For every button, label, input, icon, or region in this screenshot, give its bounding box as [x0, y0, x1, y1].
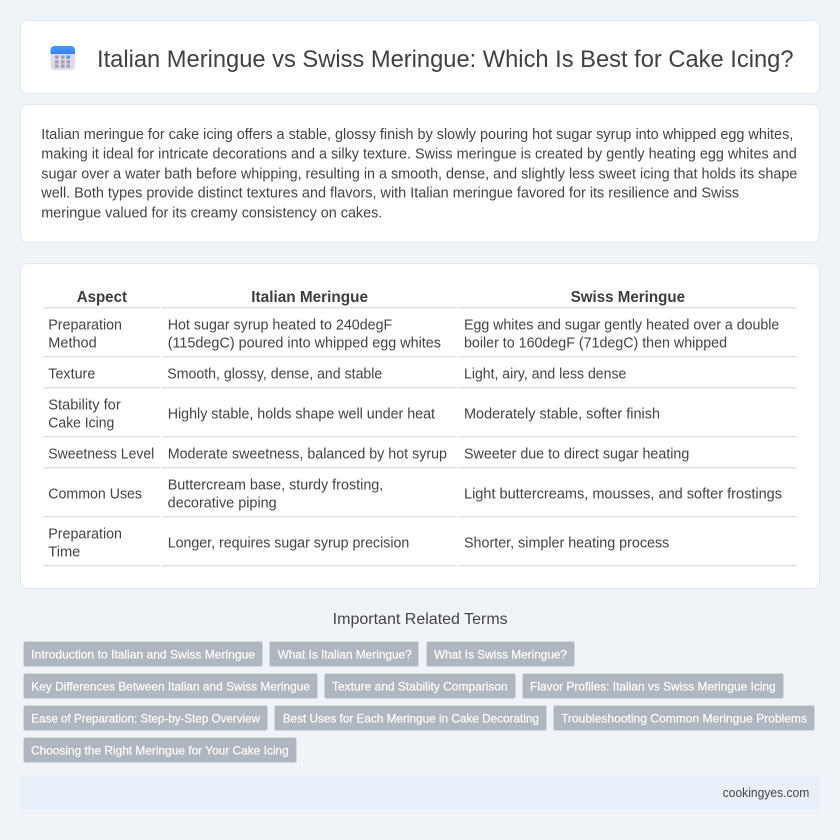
tag: Flavor Profiles: Italian vs Swiss Meringue Icing — [530, 679, 776, 693]
tag — [270, 642, 418, 666]
panel: header — [20, 20, 820, 94]
row: preparation method: Preparation — [48, 317, 122, 333]
row: preparation method: (115degC) poured into whipped egg whites — [168, 335, 441, 351]
tag: Best Uses for Each Meringue in Cake Decorating — [283, 711, 539, 725]
tag: Key Differences Between Italian and Swiss Meringue — [31, 679, 310, 693]
row: preparation method: boiler to 160degF (71degC) then whipped — [464, 335, 727, 351]
table header: Aspect — [77, 289, 128, 306]
table header: Italian Meringue — [251, 289, 368, 306]
tag — [554, 706, 814, 730]
row: stability — [43, 397, 797, 437]
tag — [274, 706, 546, 730]
row: common uses — [43, 477, 797, 517]
row: preparation time: Time — [48, 544, 80, 560]
table header — [43, 289, 797, 308]
row: texture: Smooth, glossy, dense, and stable — [167, 366, 382, 382]
row: texture: Light, airy, and less dense — [464, 366, 626, 382]
tag: What Is Italian Meringue? — [278, 647, 412, 661]
row: preparation method: Hot sugar syrup heated to 240degF — [168, 317, 393, 333]
row: stability: Moderately stable, softer finish — [464, 406, 660, 422]
row: sweetness — [43, 446, 797, 468]
row: preparation time: Preparation — [48, 526, 122, 542]
panel: comparison table — [20, 264, 820, 588]
tag: Introduction to Italian and Swiss Meringue — [31, 647, 255, 661]
tag — [24, 674, 318, 698]
row: texture: Texture — [48, 366, 95, 382]
tag — [522, 674, 784, 698]
row: preparation method: Egg whites and sugar gently heated over a double — [464, 317, 779, 333]
row: texture — [43, 366, 797, 388]
row: sweetness: Sweeter due to direct sugar heating — [464, 446, 689, 462]
row: stability: Stability for — [48, 397, 121, 413]
tag: Choosing the Right Meringue for Your Cake Icing — [31, 743, 289, 757]
tag — [324, 674, 516, 698]
row: common uses: Common Uses — [48, 486, 142, 502]
row: sweetness: Sweetness Level — [48, 446, 154, 462]
tag — [24, 738, 296, 762]
row: common uses: Buttercream base, sturdy frosting, — [168, 477, 383, 493]
table header: Swiss Meringue — [571, 289, 685, 306]
row: stability: Highly stable, holds shape well under heat — [168, 406, 435, 422]
tag — [24, 642, 262, 666]
row: preparation time: Shorter, simpler heating process — [464, 535, 669, 551]
tag: Texture and Stability Comparison — [332, 679, 508, 693]
intro text: Italian meringue for cake icing offers a stable, glossy finish by slowly pouring hot sugar syrup into whipped egg whites, — [41, 127, 793, 143]
source text: cookingyes.com — [723, 786, 809, 800]
related term tags — [24, 642, 814, 762]
intro text: sugar over a water bath before whipping, resulting in a smooth, dense, and slightly less sweet icing that holds its shape — [41, 166, 797, 182]
heading: related terms: Important Related Terms — [333, 611, 508, 628]
row: preparation time — [43, 526, 797, 566]
row: preparation method — [43, 317, 797, 357]
tag — [426, 642, 574, 666]
title: Italian Meringue vs Swiss Meringue: Which Is Best for Cake Icing? — [97, 46, 794, 73]
footer — [20, 776, 820, 810]
panel: introduction — [20, 104, 820, 242]
row: preparation time: Longer, requires sugar syrup precision — [168, 535, 409, 551]
tag: Ease of Preparation: Step-by-Step Overview — [31, 711, 260, 725]
row: common uses: Light buttercreams, mousses, and softer frostings — [464, 486, 782, 502]
tag: What Is Swiss Meringue? — [434, 647, 567, 661]
row: sweetness: Moderate sweetness, balanced by hot syrup — [168, 446, 447, 462]
intro text: making it ideal for intricate decorations and a silky texture. Swiss meringue is created by gently heating egg whites and — [41, 146, 797, 162]
row: stability: Cake Icing — [48, 415, 114, 431]
intro text: well. Both types provide distinct textures and flavors, with Italian meringue favored for its resilience and Swiss — [40, 186, 739, 202]
row: preparation method: Method — [48, 335, 97, 351]
tag — [24, 706, 268, 730]
tag: Troubleshooting Common Meringue Problems — [561, 711, 807, 725]
row: common uses: decorative piping — [168, 495, 277, 511]
intro text — [40, 127, 797, 222]
icon: calendar — [50, 46, 75, 70]
intro text: meringue valued for its creamy consistency on cakes. — [41, 206, 382, 222]
